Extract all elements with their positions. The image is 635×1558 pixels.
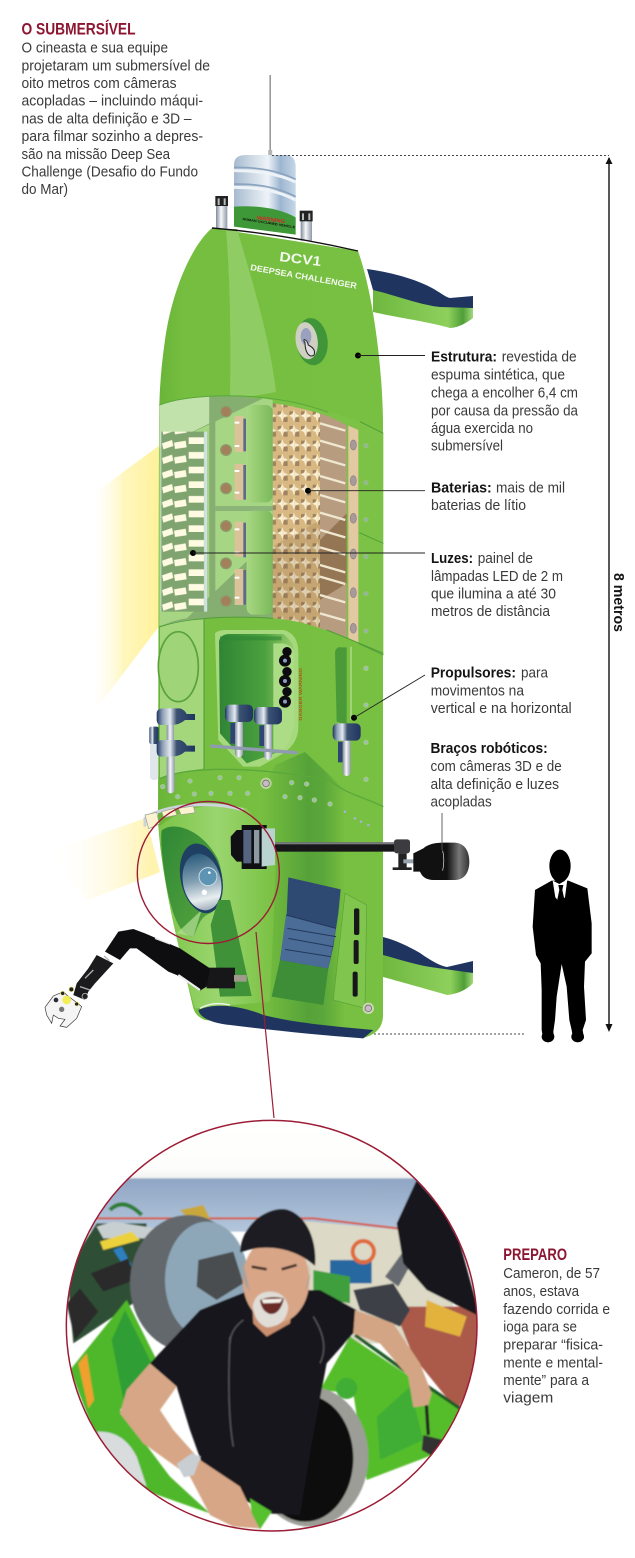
magnifier connector line <box>256 932 274 1118</box>
text block: submarine introduction: projetaram um submersível de <box>22 57 210 74</box>
text block: Estrutura: espuma sintética, que <box>431 366 565 384</box>
sensor tower: HUMAN OCCUPIED VEHICLE <box>242 217 296 229</box>
LED light panel <box>161 432 207 612</box>
right thruster <box>333 723 361 776</box>
hull lettering: DCV1 <box>279 249 323 269</box>
text block: Propulsores: Propulsores: <box>431 665 516 682</box>
text block: Braços robóticos: alta definição e luzes <box>430 776 559 793</box>
height dimension: 8 metros <box>272 156 627 1034</box>
text block: Braços robóticos <box>430 740 562 811</box>
leader line: Luzes <box>190 550 425 556</box>
text block: Preparo: preparar “fisica- <box>503 1337 603 1354</box>
height dimension: 8 metros: 8 metros <box>610 573 627 632</box>
text block: submarine introduction: do Mar) <box>22 181 68 198</box>
text block: submarine introduction: Challenge (Desafio do Fundo <box>22 164 198 180</box>
hull top edge <box>212 228 358 251</box>
leader line: Propulsores <box>351 675 425 721</box>
text block: Estrutura: revestida de <box>502 349 577 366</box>
warning label: DANGER WARNING <box>298 668 304 721</box>
left compartment <box>158 619 204 778</box>
hull porthole <box>293 316 330 367</box>
heading: O submersível <box>22 20 210 198</box>
text block: submarine introduction: são na missão Deep Sea <box>22 146 171 163</box>
central recess <box>215 630 304 767</box>
bolt <box>260 778 272 789</box>
hull lettering: DEEPSEA CHALLENGER <box>250 262 358 291</box>
rivets <box>161 666 368 806</box>
text block: Preparo: mente” para a <box>503 1372 590 1389</box>
text block: Preparo: fazendo corrida e <box>503 1301 610 1318</box>
text block: Propulsores: vertical e na horizontal <box>431 700 572 717</box>
text block: Estrutura: Estrutura: <box>431 349 497 366</box>
lithium battery block <box>273 397 358 643</box>
text block: Baterias: baterias de lítio <box>431 497 526 514</box>
text block: Estrutura <box>431 349 579 455</box>
text block: Propulsores: movimentos na <box>431 683 525 700</box>
text block: submarine introduction: oito metros com câmeras <box>22 75 176 92</box>
cutaway section: batteries and lights <box>159 396 383 670</box>
rivets on the lower collar <box>344 810 370 826</box>
heading: O submersível: O SUBMERSÍVEL <box>22 20 136 38</box>
light beam: upper LED panel <box>85 445 160 724</box>
text block: Estrutura: chega a encolher 6,4 cm <box>431 384 578 402</box>
text block: Propulsores: para <box>521 665 549 682</box>
lamp rail <box>145 805 243 829</box>
light beam: lower lamps <box>45 818 160 900</box>
text block: Braços robóticos: com câmeras 3D e de <box>430 758 562 775</box>
text block: Estrutura: submersível <box>431 438 503 455</box>
photo: James Cameron in the hatch <box>60 1110 493 1531</box>
text block: Luzes: lâmpadas LED de 2 m <box>431 568 563 585</box>
viewport dome <box>174 839 229 917</box>
centre thrusters <box>212 705 296 760</box>
upper rear fin <box>367 269 473 328</box>
sensor tower: WARNING <box>256 215 285 225</box>
text block: Preparo: anos, estava <box>503 1283 580 1300</box>
text block: Braços robóticos: acopladas <box>430 794 492 811</box>
leader line: Estrutura <box>355 352 425 358</box>
ballast bolts and rails <box>215 405 273 615</box>
sensor posts <box>215 196 313 241</box>
lower rear fin <box>383 937 473 995</box>
text block: submarine introduction: acopladas – incluindo máqui- <box>22 93 203 110</box>
side thruster housing <box>272 877 341 1005</box>
vent panel <box>333 893 374 1014</box>
text block: Baterias: mais de mil <box>496 480 565 497</box>
green wedge <box>211 900 252 997</box>
text block: submarine introduction: O cineasta e sua equipe <box>22 40 168 57</box>
robotic manipulator <box>45 929 247 1027</box>
hull underside <box>198 1006 373 1038</box>
text block: Luzes: que ilumina a até 30 <box>431 586 556 603</box>
camera clamp <box>231 825 275 869</box>
text block: Propulsores <box>431 665 572 717</box>
hull lettering <box>250 249 358 291</box>
thruster bay section <box>149 619 383 807</box>
right recess <box>327 630 383 725</box>
text block: submarine introduction: para filmar sozinho a depres- <box>22 128 203 145</box>
human silhouette for scale <box>533 850 592 1042</box>
sensor tower <box>234 155 296 235</box>
viewport recess <box>161 827 223 937</box>
heading: Preparo: PREPARO <box>503 1246 567 1264</box>
text block: Luzes <box>431 550 563 620</box>
text block: Preparo <box>503 1265 610 1407</box>
text block: Estrutura: água exercida no <box>431 420 533 437</box>
text block: Preparo: Cameron, de 57 <box>503 1265 600 1282</box>
leader line: Braços robóticos <box>441 813 443 850</box>
control knobs <box>279 647 292 708</box>
text block: Estrutura: por causa da pressão da <box>431 402 579 419</box>
text block: Luzes: Luzes: <box>431 550 473 567</box>
text block: Braços robóticos: Braços robóticos: <box>430 740 548 757</box>
nose section <box>45 805 469 1038</box>
leader line: Baterias <box>305 488 425 494</box>
collar line <box>160 769 383 807</box>
camera arm <box>275 839 469 880</box>
text block: Luzes: painel de <box>478 550 533 567</box>
hull highlight stripe <box>226 229 276 400</box>
text block: Baterias <box>431 480 565 514</box>
text block: Baterias: Baterias: <box>431 480 492 497</box>
text block: Preparo: viagem <box>503 1390 553 1407</box>
magnifier circle on viewport <box>137 802 279 944</box>
antenna <box>268 75 272 156</box>
submarine hull <box>158 228 383 1038</box>
central hull shading <box>262 752 345 1030</box>
text block: submarine introduction: nas de alta definição e 3D – <box>22 110 192 127</box>
text block: submarine introduction <box>22 40 210 198</box>
left thrusters <box>149 708 195 793</box>
text block: Preparo: mente e mental- <box>503 1354 603 1371</box>
text block: Preparo: ioga para se <box>503 1319 577 1336</box>
text block: Luzes: metros de distância <box>431 603 551 620</box>
